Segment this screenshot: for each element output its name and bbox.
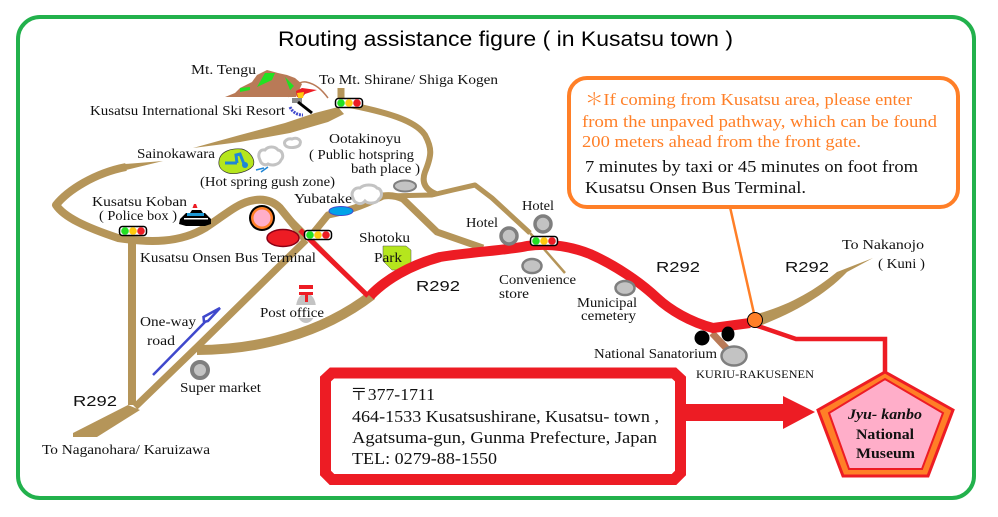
map labels: store: [499, 287, 529, 302]
callout leader line: [730, 207, 755, 318]
map labels: Post office: [260, 306, 324, 321]
map labels: Ootakinoyu: [329, 132, 401, 147]
icon: convenience store: [522, 259, 542, 273]
icon: super market: [192, 362, 208, 378]
map labels: Super market: [180, 381, 261, 396]
map labels: Hotel: [522, 199, 554, 214]
map labels: ( Police box ): [99, 209, 177, 224]
map labels: ( Public hotspring: [309, 148, 414, 163]
map labels: R292: [656, 259, 700, 276]
callout box: 200 meters ahead from the front gate.: [582, 132, 861, 151]
callout box: 7 minutes by taxi or 45 minutes on foot from: [585, 157, 918, 176]
map labels: R292: [73, 393, 117, 410]
map labels: Shotoku: [359, 231, 410, 246]
icon: Sainokawara: [219, 149, 254, 174]
address box: 〒377-1711: [350, 385, 435, 404]
callout box: from the unpaved pathway, which can be found: [582, 112, 938, 131]
map labels: One-way: [140, 315, 196, 330]
map labels: KURIU-RAKUSENEN: [696, 367, 814, 381]
icon: one-way arrow: [153, 308, 220, 375]
map labels: (Hot spring gush zone): [200, 175, 335, 190]
icon: onsen ring: [249, 205, 275, 231]
callout box: Kusatsu Onsen Bus Terminal.: [585, 178, 806, 197]
road network: [56, 88, 873, 437]
map labels: bath place ): [351, 162, 420, 177]
icon: Shotoku Park: [383, 246, 411, 270]
map labels: Sainokawara: [137, 147, 216, 162]
icon: police car: [179, 204, 211, 226]
map labels: To Nakanojo: [842, 238, 924, 253]
map labels: Kusatsu Koban: [92, 195, 187, 210]
address box: [326, 373, 680, 480]
map labels: cemetery: [581, 309, 636, 324]
map labels: ( Kuni ): [878, 257, 925, 272]
map labels: Mt. Tengu: [191, 63, 256, 78]
museum pentagon: Jyu- kanbo: [847, 407, 922, 423]
map labels: Municipal: [577, 296, 637, 311]
map labels: road: [147, 334, 175, 349]
icon: post office: [260, 285, 325, 323]
map labels: R292: [785, 259, 829, 276]
address box: Agatsuma-gun, Gunma Prefecture, Japan: [352, 428, 658, 447]
museum pentagon: National: [856, 427, 914, 443]
map labels: Park: [374, 251, 402, 266]
marker: entrance: [748, 312, 762, 328]
map labels: To Mt. Shirane/ Shiga Kogen: [319, 73, 498, 88]
map labels: R292: [416, 278, 460, 295]
map labels: Convenience: [499, 273, 576, 288]
map labels: National Sanatorium: [594, 347, 717, 362]
icon: Yubatake pool: [329, 206, 353, 216]
map labels: Kusatsu International Ski Resort: [90, 104, 285, 119]
icon: cemetery: [616, 281, 634, 295]
callout box: ＊If coming from Kusatsu area, please enter: [585, 90, 912, 109]
title: Routing assistance figure ( in Kusatsu town ): [278, 28, 733, 51]
icon: ski resort: [288, 82, 328, 115]
address box: TEL: 0279-88-1550: [352, 449, 497, 468]
arrow to museum: [686, 396, 815, 429]
red route to museum: [300, 230, 885, 373]
icon: Mt. Tengu: [225, 70, 302, 97]
icon: hotel 2: [535, 216, 551, 232]
traffic light: bus terminal: [304, 230, 332, 240]
icon: sanatorium dots: [694, 326, 734, 346]
traffic light: koban: [120, 226, 146, 236]
map labels: To Naganohara/ Karuizawa: [42, 443, 211, 458]
map labels: Yubatake: [294, 192, 352, 207]
icon: Yubatake steam: [352, 185, 381, 204]
icon: Kuriu-Rakusenen: [722, 346, 746, 366]
address box: 464-1533 Kusatsushirane, Kusatsu- town ,: [352, 407, 659, 426]
icon: hotel 1: [501, 228, 517, 244]
icon: Ootakinoyu: [394, 180, 416, 192]
map labels: [42, 63, 925, 458]
icon: Sainokawara steam: [256, 138, 300, 172]
traffic light: hotel: [530, 236, 558, 246]
map labels: Hotel: [466, 216, 498, 231]
callout box: [569, 78, 958, 207]
traffic light: north: [336, 98, 362, 108]
museum pentagon: [818, 372, 953, 476]
icon: bus terminal: [267, 230, 299, 246]
map labels: Kusatsu Onsen Bus Terminal: [140, 251, 316, 266]
museum pentagon: Museum: [856, 446, 916, 462]
